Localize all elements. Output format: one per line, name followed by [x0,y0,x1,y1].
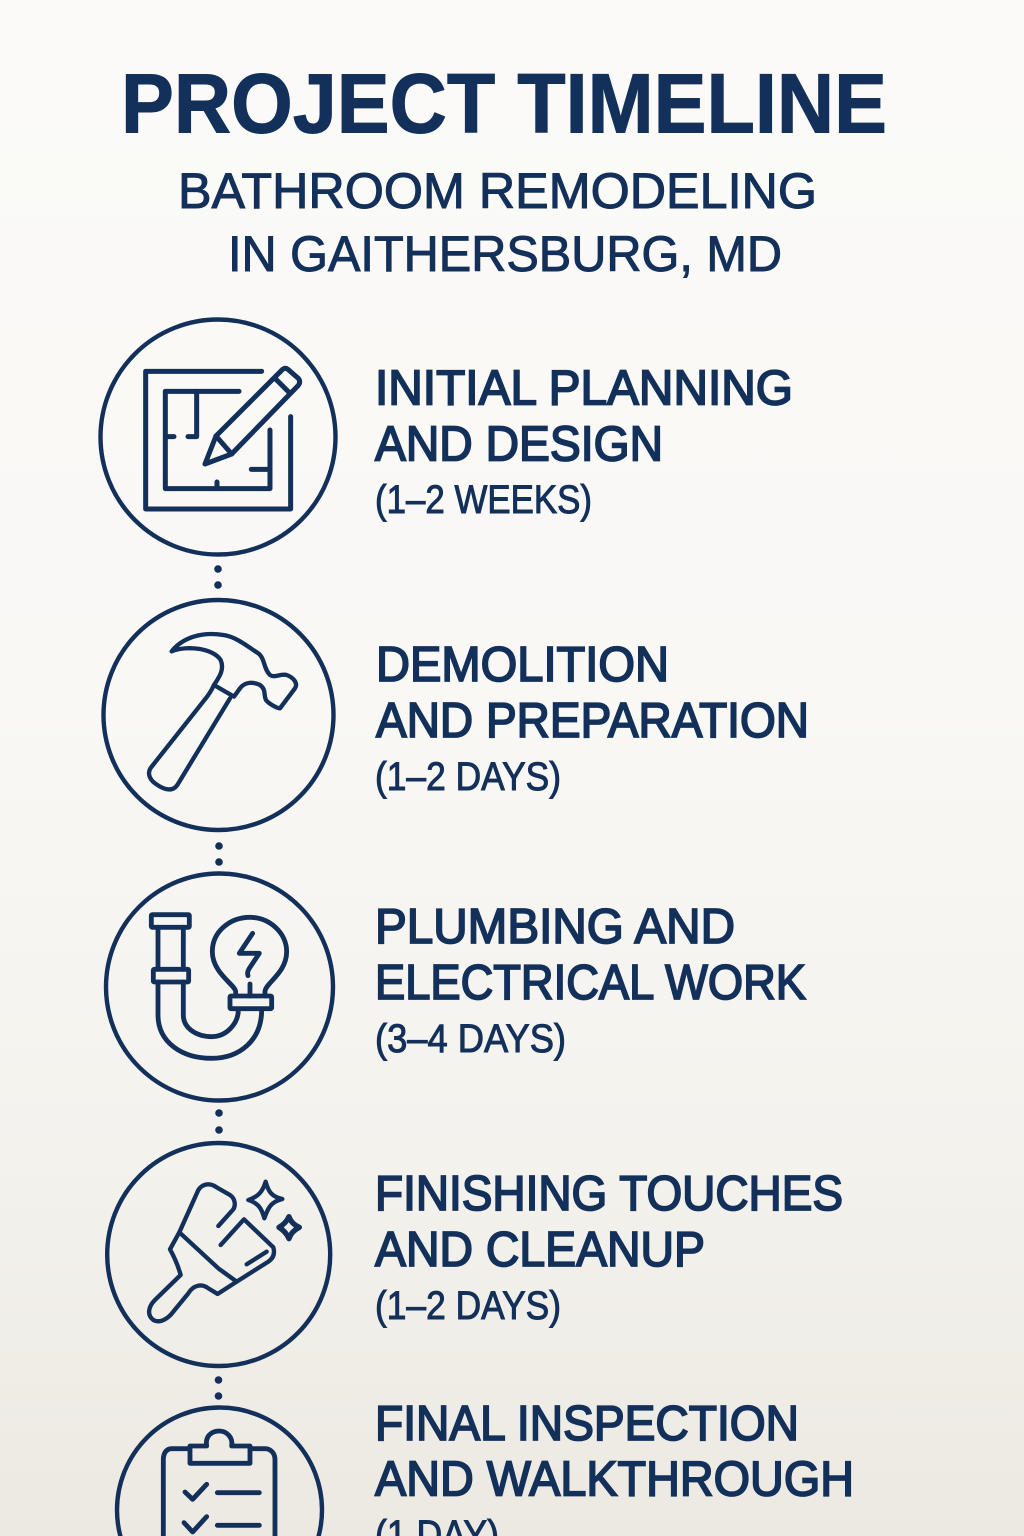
step 3 text: PLUMBING AND [375,900,735,954]
subtitle: BATHROOM REMODELING [178,163,817,219]
step 1: initial planning and design [100,320,793,554]
step 2 text: DEMOLITION [376,638,669,692]
step 3 text: (3–4 DAYS) [375,1017,566,1061]
step 3: plumbing and electrical work [106,874,806,1100]
step 4 text: (1–2 DAYS) [375,1284,561,1328]
step 2 text: (1–2 DAYS) [375,755,561,799]
icon: hammer [104,600,334,830]
step 5: final inspection and walkthrough [117,1397,854,1536]
step 4: finishing touches and cleanup [107,1143,843,1366]
step 4 text: FINISHING TOUCHES [375,1167,843,1221]
icon: clipboard checklist [117,1408,322,1536]
icon: blueprint and pencil [100,320,336,554]
step 5 text: FINAL INSPECTION [375,1397,799,1451]
icon: pipe and light bulb [106,874,333,1100]
step 2: demolition and preparation [104,600,809,830]
step 1 text: AND DESIGN [375,418,663,472]
connector dots 2 [215,842,223,866]
step 3 text: ELECTRICAL WORK [375,956,806,1010]
subtitle [178,163,817,282]
step 2 text: AND PREPARATION [376,694,809,748]
connector dots 3 [215,1109,223,1134]
icon: paint brush with sparkles [107,1143,330,1366]
connector dots 1 [214,565,222,589]
step 1 text: INITIAL PLANNING [375,362,793,416]
title: PROJECT TIMELINE [121,56,887,150]
subtitle: IN GAITHERSBURG, MD [228,226,782,282]
step 5 text: AND WALKTHROUGH [375,1452,854,1506]
connector dots 4 [215,1376,222,1400]
step 1 text [375,362,793,522]
step 1 text: (1–2 WEEKS) [375,478,592,522]
step 5 text [375,1397,854,1536]
step 2 text [375,638,809,799]
step 4 text [375,1167,843,1328]
step 3 text [375,900,806,1061]
step 4 text: AND CLEANUP [375,1223,705,1277]
